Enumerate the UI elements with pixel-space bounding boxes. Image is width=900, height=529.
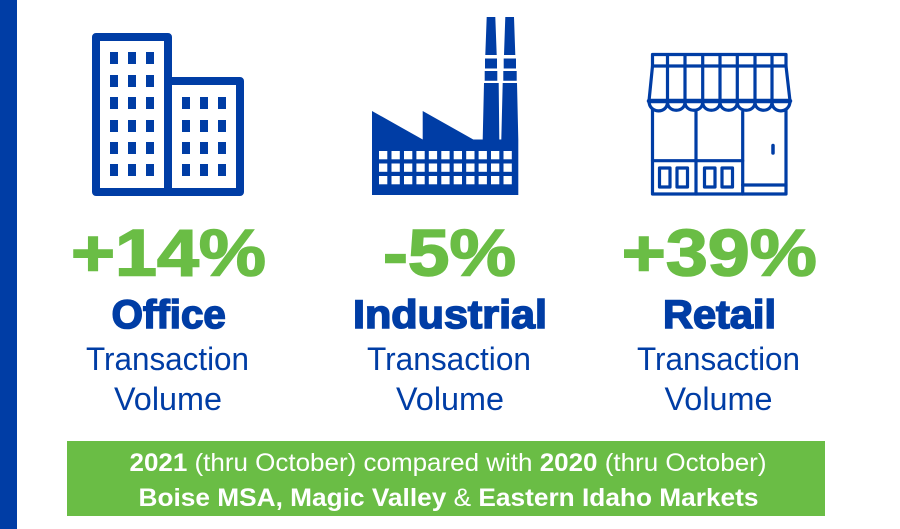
- left blue edge bar: [0, 0, 17, 529]
- office label: Transaction: [86, 341, 249, 377]
- industrial heading: Industrial: [353, 293, 547, 337]
- icon: storefront: [649, 54, 790, 194]
- industrial label line 2: Volume: [396, 381, 504, 417]
- icon: office buildings: [96, 37, 240, 192]
- retail percentage: +39%: [622, 216, 817, 290]
- panel: office: [71, 37, 266, 417]
- office percentage: +14%: [71, 216, 266, 290]
- icon: factory: [372, 17, 518, 195]
- office heading: Office: [112, 293, 226, 337]
- retail heading: Retail: [663, 293, 776, 337]
- retail label line 2: Volume: [664, 381, 772, 417]
- panel: industrial: [353, 17, 547, 417]
- industrial percentage: -5%: [383, 216, 516, 290]
- callout: comparison note: [67, 441, 825, 516]
- callout line 1: 2021 (thru October) compared with 2020 (thru October): [130, 449, 766, 477]
- industrial label: Transaction: [367, 341, 531, 377]
- callout line 2: Boise MSA, Magic Valley & Eastern Idaho Markets: [138, 484, 758, 512]
- retail label: Transaction: [637, 341, 800, 377]
- office label line 2: Volume: [114, 381, 222, 417]
- panel: retail: [622, 54, 817, 417]
